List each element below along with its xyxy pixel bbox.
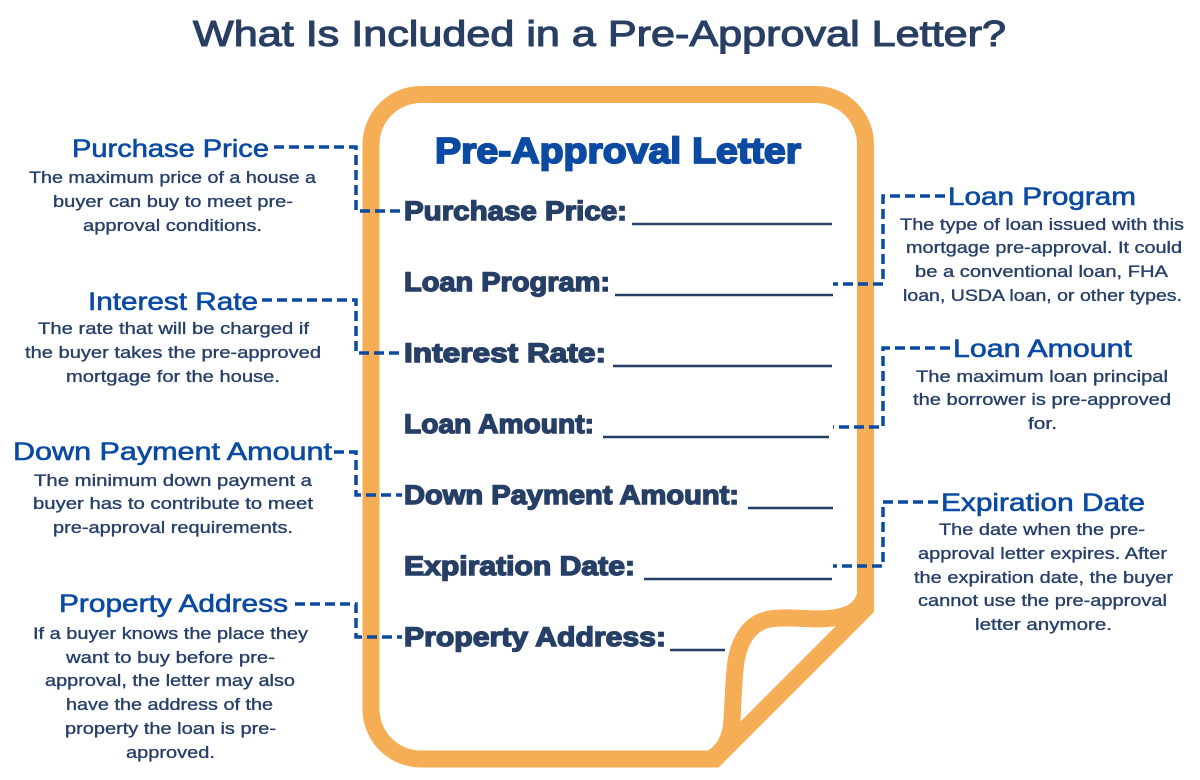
callout: expiration date: cannot use the pre-approval	[918, 591, 1167, 610]
callout: property address: have the address of the	[66, 695, 273, 714]
callout: property address: Property Address	[59, 590, 288, 618]
callout: down payment amount: buyer has to contribute to meet	[33, 494, 313, 513]
callout: property address	[33, 590, 309, 762]
connector: loan amount	[833, 348, 950, 427]
field: interest rate: Interest Rate:	[404, 338, 606, 368]
connector: purchase price	[274, 147, 402, 211]
document icon: letter outline with folded corner	[371, 94, 866, 759]
callout: down payment amount	[13, 438, 332, 537]
callout: loan program: Loan Program	[948, 183, 1136, 211]
field: down payment amount: Down Payment Amount:	[404, 480, 739, 510]
callout: interest rate: Interest Rate	[88, 288, 258, 316]
callout: property address: want to buy before pre-	[65, 648, 275, 667]
callout: expiration date: the expiration date, the buyer	[914, 568, 1173, 587]
callout: expiration date: approval letter expires. After	[918, 544, 1167, 563]
callout: loan program: mortgage pre-approval. It could	[906, 238, 1182, 257]
connector: down payment amount	[334, 452, 402, 495]
callout: down payment amount: pre-approval requirements.	[53, 518, 293, 537]
connector: property address	[295, 604, 402, 637]
field: loan amount: Loan Amount:	[404, 409, 594, 439]
callout: expiration date: Expiration Date	[941, 489, 1145, 517]
callout: loan program: The type of loan issued with this	[900, 215, 1184, 234]
callout: expiration date: letter anymore.	[975, 615, 1112, 634]
callout: interest rate	[25, 288, 321, 386]
connector: interest rate	[262, 300, 402, 353]
callout: interest rate: The rate that will be charged if	[38, 319, 309, 338]
callout: purchase price: approval conditions.	[83, 216, 262, 235]
callout: down payment amount: Down Payment Amount	[13, 438, 332, 466]
callout: interest rate: mortgage for the house.	[66, 367, 280, 386]
callout: loan amount	[913, 335, 1171, 433]
callout: expiration date: The date when the pre-	[939, 520, 1145, 539]
callout: interest rate: the buyer takes the pre-approved	[25, 343, 321, 362]
callout: purchase price: buyer can buy to meet pre-	[53, 192, 293, 211]
callout: loan amount: the borrower is pre-approved	[913, 390, 1171, 409]
field: expiration date: Expiration Date:	[404, 551, 635, 581]
callout: property address: approval, the letter may also	[45, 671, 295, 690]
callout: expiration date	[914, 489, 1173, 634]
callout: purchase price: The maximum price of a house a	[29, 168, 317, 187]
field: property address: Property Address:	[404, 622, 666, 652]
title: What Is Included in a Pre-Approval Letter?	[193, 13, 1006, 54]
field: loan program: Loan Program:	[404, 267, 610, 297]
callout: down payment amount: The minimum down payment a	[34, 471, 313, 490]
callout: property address: approved.	[126, 743, 215, 762]
callout: purchase price: Purchase Price	[72, 135, 269, 163]
callout: property address: If a buyer knows the place they	[33, 624, 309, 643]
field: purchase price: Purchase Price:	[404, 196, 627, 226]
connector: expiration date	[833, 502, 938, 566]
callout: purchase price	[29, 135, 317, 235]
callout: loan program	[900, 183, 1184, 305]
callout: loan amount: Loan Amount	[953, 335, 1132, 363]
connector: loan program	[833, 196, 945, 284]
document heading: Pre-Approval Letter	[435, 130, 801, 171]
callout: loan program: be a conventional loan, FHA	[915, 262, 1169, 281]
callout: property address: property the loan is pre-	[65, 719, 276, 738]
callout: loan program: loan, USDA loan, or other types.	[903, 286, 1182, 305]
callout: loan amount: for.	[1028, 414, 1057, 433]
callout: loan amount: The maximum loan principal	[916, 367, 1168, 386]
